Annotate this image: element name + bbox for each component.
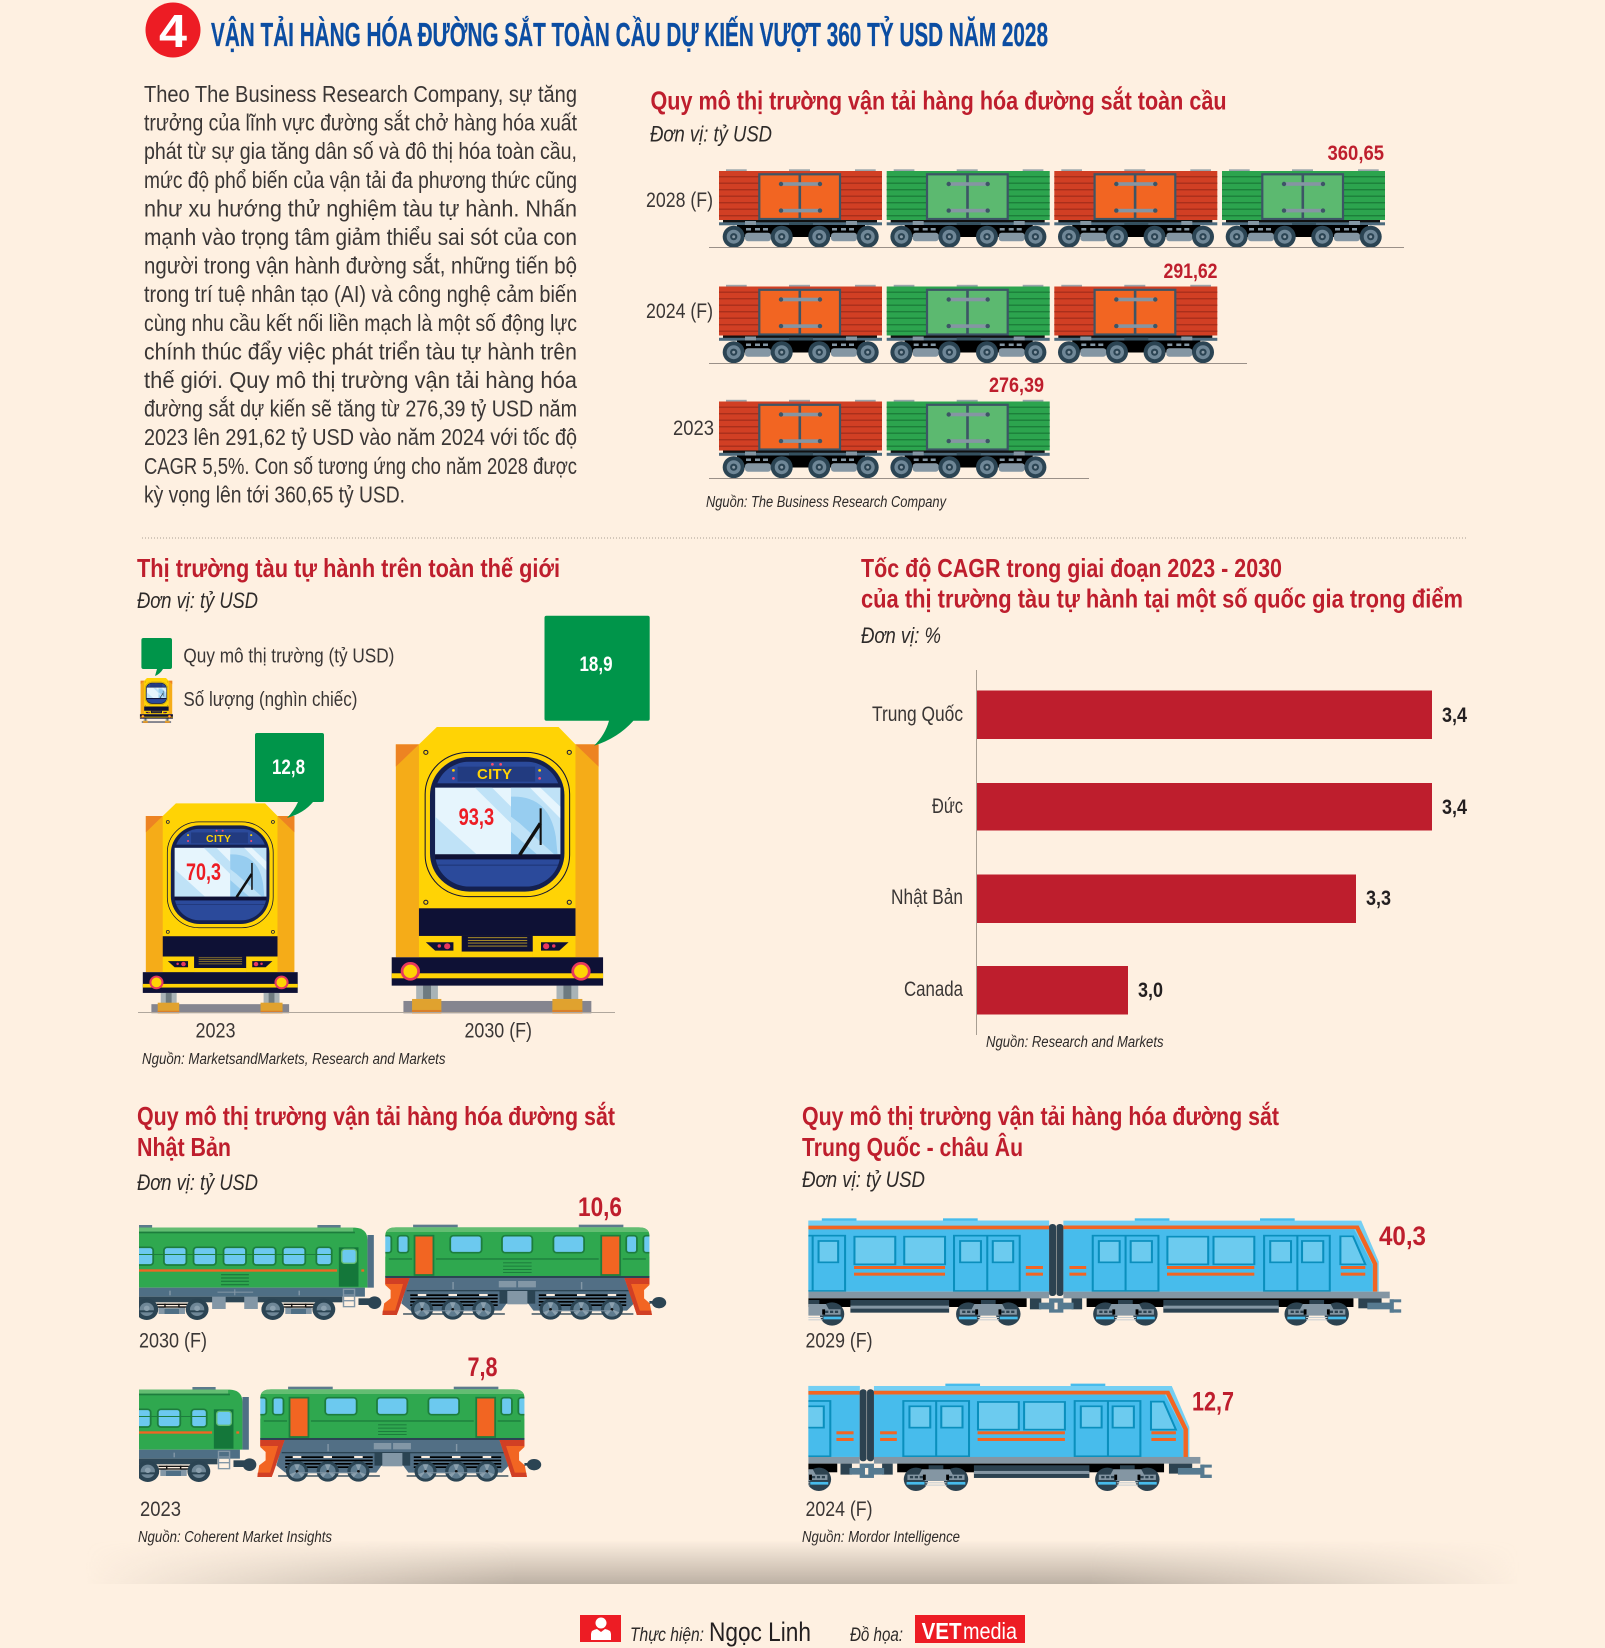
intro text block: thế giới. Quy mô thị trường vận tải hàng hóa [144, 367, 577, 393]
legend: Số lượng (nghìn chiếc) [183, 689, 357, 711]
panel: global rail freight market [646, 86, 1404, 511]
train 2030: 18,9 [580, 653, 612, 676]
train 2023: CITY [206, 833, 231, 845]
bar: Trung Quốc [872, 690, 1467, 739]
bar: Đức: Đức [932, 795, 963, 818]
train 2023: 70,3 [186, 859, 221, 886]
source: Nguồn: Research and Markets [986, 1034, 1164, 1051]
logo: VETmedia: media [963, 1618, 1017, 1644]
train 2030: 93,3 [459, 804, 494, 831]
credit: author: Thực hiện: [630, 1625, 704, 1646]
intro text block: CAGR 5,5%. Con số tương ứng cho năm 2028 được [144, 453, 577, 479]
number badge [146, 2, 200, 58]
row 2024 [646, 260, 1247, 364]
header [146, 2, 1048, 58]
train 2023: 12,8 [272, 756, 305, 779]
intro text block: 2023 lên 291,62 tỷ USD vào năm 2024 với tốc độ [144, 424, 577, 450]
train 2023: 2023 [196, 1020, 236, 1043]
label 2029: 2029 (F) [806, 1330, 872, 1353]
unit: Đơn vị: tỷ USD [650, 122, 772, 146]
bar: Nhật Bản: 3,3 [1366, 887, 1391, 910]
row 2028: 360,65 [1328, 142, 1384, 165]
intro text block: phát từ sự gia tăng dân số và đô thị hóa toàn cầu, [144, 138, 577, 164]
panel: Japan rail freight market [137, 1102, 666, 1546]
label 2030: 2030 (F) [139, 1330, 207, 1353]
train 2024 [808, 1384, 1212, 1491]
train 2030: CITY [477, 766, 512, 783]
train 2030: 2030 (F) [464, 1020, 532, 1043]
row 2028: 2028 (F) [646, 189, 713, 212]
legend: Quy mô thị trường (tỷ USD) [183, 646, 394, 668]
bar: Đức: 3,4 [1442, 796, 1467, 819]
logo: VETmedia: VET [922, 1618, 962, 1644]
bar: Canada: Canada [904, 978, 963, 1001]
value 7,8: 7,8 [468, 1352, 498, 1382]
intro text block: trưởng của lĩnh vực đường sắt chở hàng hóa xuất [144, 110, 578, 136]
unit: Đơn vị: % [861, 623, 941, 648]
bar: Trung Quốc: 3,4 [1442, 704, 1467, 727]
intro text block [144, 81, 578, 507]
heading: của thị trường tàu tự hành tại một số quốc gia trọng điểm [861, 584, 1463, 614]
title: VẬN TẢI HÀNG HÓA ĐƯỜNG SẮT TOÀN CẦU DỰ KIẾN VƯỢT 360 TỶ USD NĂM 2028 [211, 16, 1048, 53]
source: Nguồn: The Business Research Company [706, 494, 947, 511]
source: Nguồn: Coherent Market Insights [138, 1529, 332, 1546]
icon: author [580, 1615, 621, 1642]
panel: China-Europe rail freight market [802, 1102, 1426, 1546]
bar: Canada [904, 966, 1163, 1014]
source: Nguồn: MarketsandMarkets, Research and Markets [142, 1051, 446, 1068]
heading: Thị trường tàu tự hành trên toàn thế giới [137, 553, 560, 583]
row 2023: 276,39 [989, 374, 1044, 397]
heading: Nhật Bản [137, 1132, 231, 1162]
intro text block: Theo The Business Research Company, sự tăng [144, 81, 577, 107]
unit: Đơn vị: tỷ USD [137, 588, 258, 613]
source: Nguồn: Mordor Intelligence [802, 1529, 960, 1546]
intro text block: chính thúc đẩy việc phát triển tàu tự hành trên [144, 338, 577, 364]
train 2023 [143, 733, 324, 1043]
intro text block: cùng nhu cầu kết nối liền mạch là một số động lực [144, 310, 577, 336]
panel: autonomous trains market [137, 553, 650, 1068]
legend [140, 638, 394, 723]
credit: author [630, 1617, 811, 1647]
unit: Đơn vị: tỷ USD [137, 1170, 258, 1195]
heading [861, 553, 1463, 614]
unit: Đơn vị: tỷ USD [802, 1167, 925, 1192]
heading: Quy mô thị trường vận tải hàng hóa đường sắt [137, 1101, 615, 1131]
row 2023 [673, 374, 1089, 479]
heading: Quy mô thị trường vận tải hàng hóa đường sắt toàn cầu [650, 86, 1226, 116]
heading: Tốc độ CAGR trong giai đoạn 2023 - 2030 [861, 553, 1282, 583]
bar: Đức [932, 783, 1467, 830]
credit: author: Ngọc Linh [709, 1617, 811, 1647]
footer credits [580, 1615, 1025, 1647]
logo: VETmedia [915, 1615, 1025, 1644]
bar: Trung Quốc: Trung Quốc [872, 703, 963, 726]
credit: graphics: Đồ họa: [850, 1625, 903, 1646]
intro text block: mức độ phổ biến của vận tải đa phương thức cũng [144, 167, 577, 193]
intro text block: trong trí tuệ nhân tạo (AI) và công nghệ cảm biến [144, 281, 577, 307]
bar: Nhật Bản [891, 874, 1391, 923]
heading: Quy mô thị trường vận tải hàng hóa đường sắt [802, 1101, 1279, 1131]
intro text block: mạnh vào trọng tâm giảm thiểu sai sót của con [144, 224, 577, 250]
heading [802, 1101, 1279, 1162]
label 2023: 2023 [140, 1498, 181, 1521]
row 2023: 2023 [673, 417, 714, 440]
heading: Trung Quốc - châu Âu [802, 1132, 1023, 1162]
value 12,7: 12,7 [1192, 1387, 1234, 1417]
bar: Canada: 3,0 [1138, 979, 1163, 1002]
row 2024: 291,62 [1164, 260, 1218, 283]
panel: CAGR bar chart [861, 553, 1467, 1051]
row 2024: 2024 (F) [646, 300, 713, 323]
heading [137, 1101, 615, 1162]
train 2030 [119, 1225, 666, 1320]
row 2028 [646, 142, 1404, 248]
train 2030 [392, 616, 650, 1043]
value 10,6: 10,6 [578, 1192, 622, 1222]
value 40,3: 40,3 [1379, 1221, 1426, 1251]
intro text block: người trong vận hành đường sắt, những tiến bộ [144, 253, 577, 279]
intro text block: như xu hướng thử nghiệm tàu tự hành. Nhấn [144, 195, 577, 221]
intro text block: đường sắt dự kiến sẽ tăng từ 276,39 tỷ USD năm [144, 396, 577, 422]
train 2029 [780, 1218, 1401, 1326]
number badge: 4 [159, 5, 187, 57]
train 2023 [139, 1386, 542, 1482]
label 2024: 2024 (F) [806, 1498, 872, 1521]
intro text block: kỳ vọng lên tới 360,65 tỷ USD. [144, 481, 405, 507]
bar: Nhật Bản: Nhật Bản [891, 886, 963, 909]
